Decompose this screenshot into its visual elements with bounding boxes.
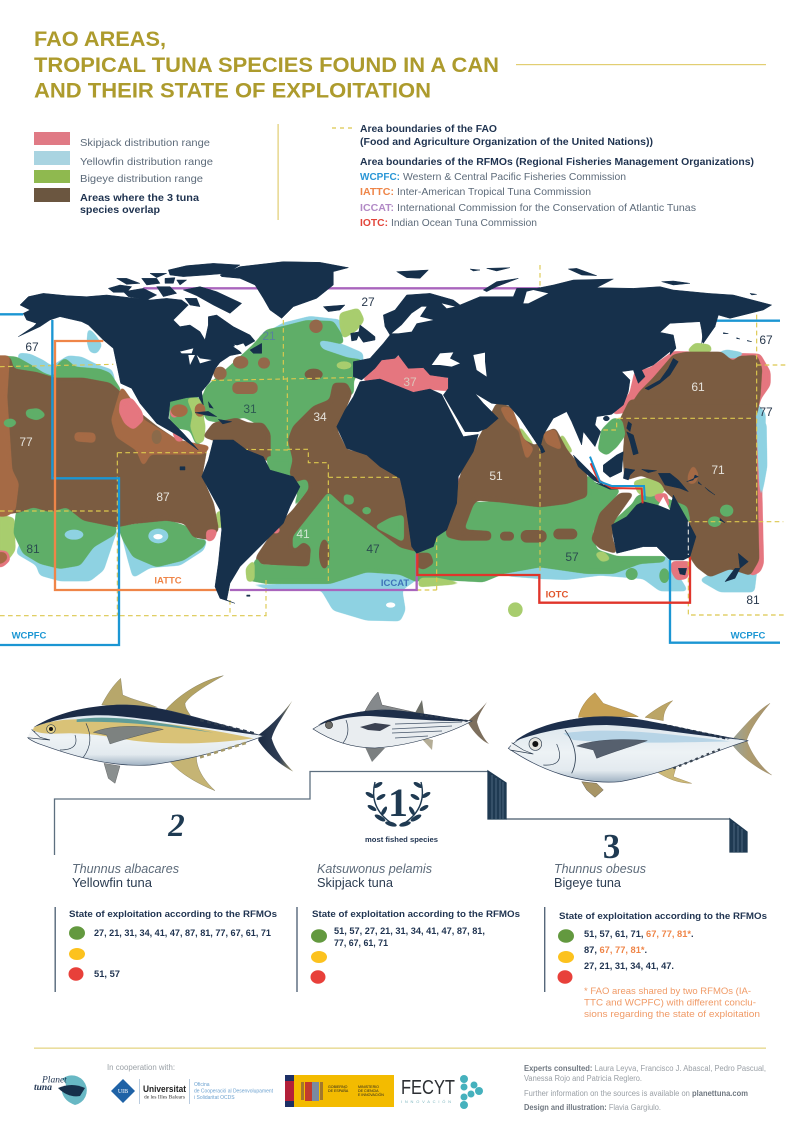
legend: species ranges: Yellowfin distribution range <box>80 156 213 168</box>
legend: area boundaries: Area boundaries of the FAO <box>360 123 497 135</box>
fish: skipjack tuna <box>313 692 489 762</box>
logo: Universitat de les Illes Balears: Universitat <box>143 1084 187 1095</box>
legend: species ranges: Areas where the 3 tuna <box>80 192 199 204</box>
logo: Planet Tuna: Planet <box>41 1076 67 1086</box>
panel: bigeye exploitation: TTC and WCPFC) with different conclu- <box>584 998 756 1008</box>
panel: skipjack exploitation <box>296 907 520 992</box>
logo: Planet Tuna: tuna <box>34 1083 52 1093</box>
panel: bigeye exploitation: State of exploitation according to the RFMOs <box>559 911 767 921</box>
rank 1 laurel and caption: most fished species <box>365 835 438 844</box>
logo: Gobierno de España: DE ESPAÑA <box>328 1088 349 1093</box>
panel: bigeye exploitation <box>544 907 767 1019</box>
panel: skipjack exploitation: 77, 67, 61, 71 <box>334 938 388 948</box>
title <box>34 27 499 102</box>
species: skipjack <box>317 862 432 890</box>
panel: yellowfin exploitation: State of exploitation according to the RFMOs <box>69 909 277 919</box>
logo: Gobierno de España: DE CIENCIA <box>358 1089 379 1093</box>
RFMO labels <box>12 576 766 642</box>
logo: FECYT: FECYT <box>401 1077 455 1099</box>
credits: Design and illustration: Flavia Gargiulo. <box>524 1103 661 1112</box>
panel: bigeye exploitation: 27, 21, 31, 34, 41, 47. <box>584 961 674 971</box>
map area labels: 61 <box>691 380 705 394</box>
species: skipjack: Skipjack tuna <box>317 876 393 890</box>
panel: yellowfin exploitation: 51, 57 <box>94 969 120 979</box>
RFMO labels: IATTC <box>154 576 182 586</box>
map area labels: 51 <box>489 469 503 483</box>
title: AND THEIR STATE OF EXPLOITATION <box>34 78 431 102</box>
rank 1 laurel and caption: 1 <box>388 780 408 825</box>
Indian Ocean and west Pacific <box>417 343 770 617</box>
map area labels: 41 <box>296 527 310 541</box>
rank 1 laurel and caption <box>365 780 438 844</box>
west Pacific skipjack fringe <box>612 343 770 415</box>
FAO area boundaries <box>0 265 787 616</box>
legend: area boundaries: IATTC: <box>360 186 394 198</box>
panel: yellowfin exploitation <box>54 907 277 992</box>
credits: Vanessa Rojo and Patricia Reglero. <box>524 1074 642 1083</box>
Americas and Arctic islands <box>18 262 348 603</box>
logo: Gobierno de España: GOBIERNO <box>328 1085 348 1089</box>
legend: species ranges: Bigeye distribution range <box>80 173 203 185</box>
RFMO labels: WCPFC <box>12 630 47 642</box>
map area labels: 57 <box>565 550 579 564</box>
legend: area boundaries: International Commission for the Conservation of Atlantic Tunas <box>397 202 696 214</box>
Mediterranean skipjack range <box>362 355 448 392</box>
legend: area boundaries: Indian Ocean Tuna Commission <box>391 217 537 229</box>
logo: Universitat de les Illes Balears: Oficina <box>194 1082 210 1088</box>
rank 3: 3 <box>603 827 620 866</box>
rank 2: 2 <box>167 808 185 844</box>
map area labels <box>19 295 773 607</box>
RFMO labels: IOTC <box>546 590 568 600</box>
podium outline <box>54 771 747 855</box>
panel: bigeye exploitation: 51, 57, 61, 71, 67, 77, 81*. <box>584 929 694 939</box>
logo: Gobierno de España <box>285 1075 394 1107</box>
map area labels: 67 <box>25 340 39 354</box>
map area labels: 81 <box>26 542 40 556</box>
credits: Further information on the sources is available on planettuna.com <box>524 1089 748 1098</box>
species: bigeye <box>554 862 646 890</box>
logo: FECYT: INNOVACIÓN <box>401 1099 451 1104</box>
map area labels: 77 <box>759 405 773 419</box>
map area labels: 21 <box>262 329 276 343</box>
panel: skipjack exploitation: State of exploitation according to the RFMOs <box>312 909 520 919</box>
legend: area boundaries: Inter-American Tropical Tuna Commission <box>397 186 591 198</box>
map area labels: 81 <box>746 593 760 607</box>
panel: bigeye exploitation: sions regarding the state of exploitation <box>584 1009 760 1019</box>
legend: area boundaries: Area boundaries of the RFMOs (Regional Fisheries Management Organizations) <box>360 156 754 168</box>
fish: bigeye tuna <box>508 693 772 797</box>
legend: area boundaries: Western & Central Pacific Fisheries Commission <box>403 171 626 183</box>
map area labels: 37 <box>403 375 417 389</box>
land masses <box>18 262 772 603</box>
RFMO labels: ICCAT <box>381 578 409 589</box>
RFMO boundaries <box>0 288 780 645</box>
fish: yellowfin tuna <box>27 676 293 791</box>
species: yellowfin: Thunnus albacares <box>72 862 179 876</box>
legend: species ranges: species overlap <box>80 204 160 216</box>
RFMO labels: WCPFC <box>731 630 766 642</box>
legend: species ranges: Skipjack distribution range <box>80 137 210 149</box>
legend: species ranges <box>34 132 213 216</box>
credit: in cooperation with: In cooperation with: <box>107 1063 175 1072</box>
Southeast Asia and Oceania <box>573 422 748 582</box>
legend: area boundaries: IOTC: <box>360 217 388 229</box>
title: TROPICAL TUNA SPECIES FOUND IN A CAN <box>34 53 499 77</box>
tuna distribution ranges <box>0 308 770 621</box>
map area labels: 71 <box>711 463 725 477</box>
map area labels: 67 <box>759 333 773 347</box>
logo: Gobierno de España: MINISTERIO <box>358 1085 379 1089</box>
map area labels: 87 <box>156 490 170 504</box>
species: yellowfin <box>72 862 179 890</box>
legend: area boundaries <box>332 123 754 229</box>
title: FAO AREAS, <box>34 27 166 51</box>
logo: Universitat de les Illes Balears: UIB <box>118 1089 128 1095</box>
panel: bigeye exploitation: 87, 67, 77, 81*. <box>584 945 647 955</box>
map area labels: 34 <box>313 410 327 424</box>
world map <box>0 262 787 645</box>
map area labels: 31 <box>243 402 257 416</box>
Indonesian RFMO boundaries over land <box>590 457 688 555</box>
map area labels: 77 <box>19 435 33 449</box>
species: bigeye: Thunnus obesus <box>554 862 646 876</box>
credits: Experts consulted: Laura Leyva, Francisco J. Abascal, Pedro Pascual, <box>524 1064 766 1073</box>
panel: yellowfin exploitation: 27, 21, 31, 34, 41, 47, 87, 81, 77, 67, 61, 71 <box>94 928 271 938</box>
legend: area boundaries: (Food and Agriculture Organization of the United Nations)) <box>360 136 653 148</box>
credits <box>524 1064 766 1112</box>
logo: Planet Tuna <box>34 1075 87 1105</box>
species: skipjack: Katsuwonus pelamis <box>317 862 432 876</box>
panel: bigeye exploitation: * FAO areas shared by two RFMOs (IA- <box>584 986 751 996</box>
map area labels: 27 <box>361 295 375 309</box>
logo: Universitat de les Illes Balears: de les Illes Balears <box>144 1094 185 1100</box>
Eurasia, Africa, Oceania upper part <box>337 267 772 553</box>
logo: Universitat de les Illes Balears <box>111 1079 274 1104</box>
legend: area boundaries: WCPFC: <box>360 171 400 183</box>
map area labels: 47 <box>366 542 380 556</box>
logo: Gobierno de España: E INNOVACIÓN <box>358 1092 384 1097</box>
panel: skipjack exploitation: 51, 57, 27, 21, 31, 34, 41, 47, 87, 81, <box>334 926 485 936</box>
legend: area boundaries: ICCAT: <box>360 202 394 214</box>
species: bigeye: Bigeye tuna <box>554 876 621 890</box>
logo: FECYT <box>401 1075 483 1109</box>
logo: Universitat de les Illes Balears: de Cooperació al Desenvolupament <box>194 1088 274 1094</box>
logo: Universitat de les Illes Balears: i Solidaritat OCDS <box>194 1095 235 1101</box>
species: yellowfin: Yellowfin tuna <box>72 876 152 890</box>
